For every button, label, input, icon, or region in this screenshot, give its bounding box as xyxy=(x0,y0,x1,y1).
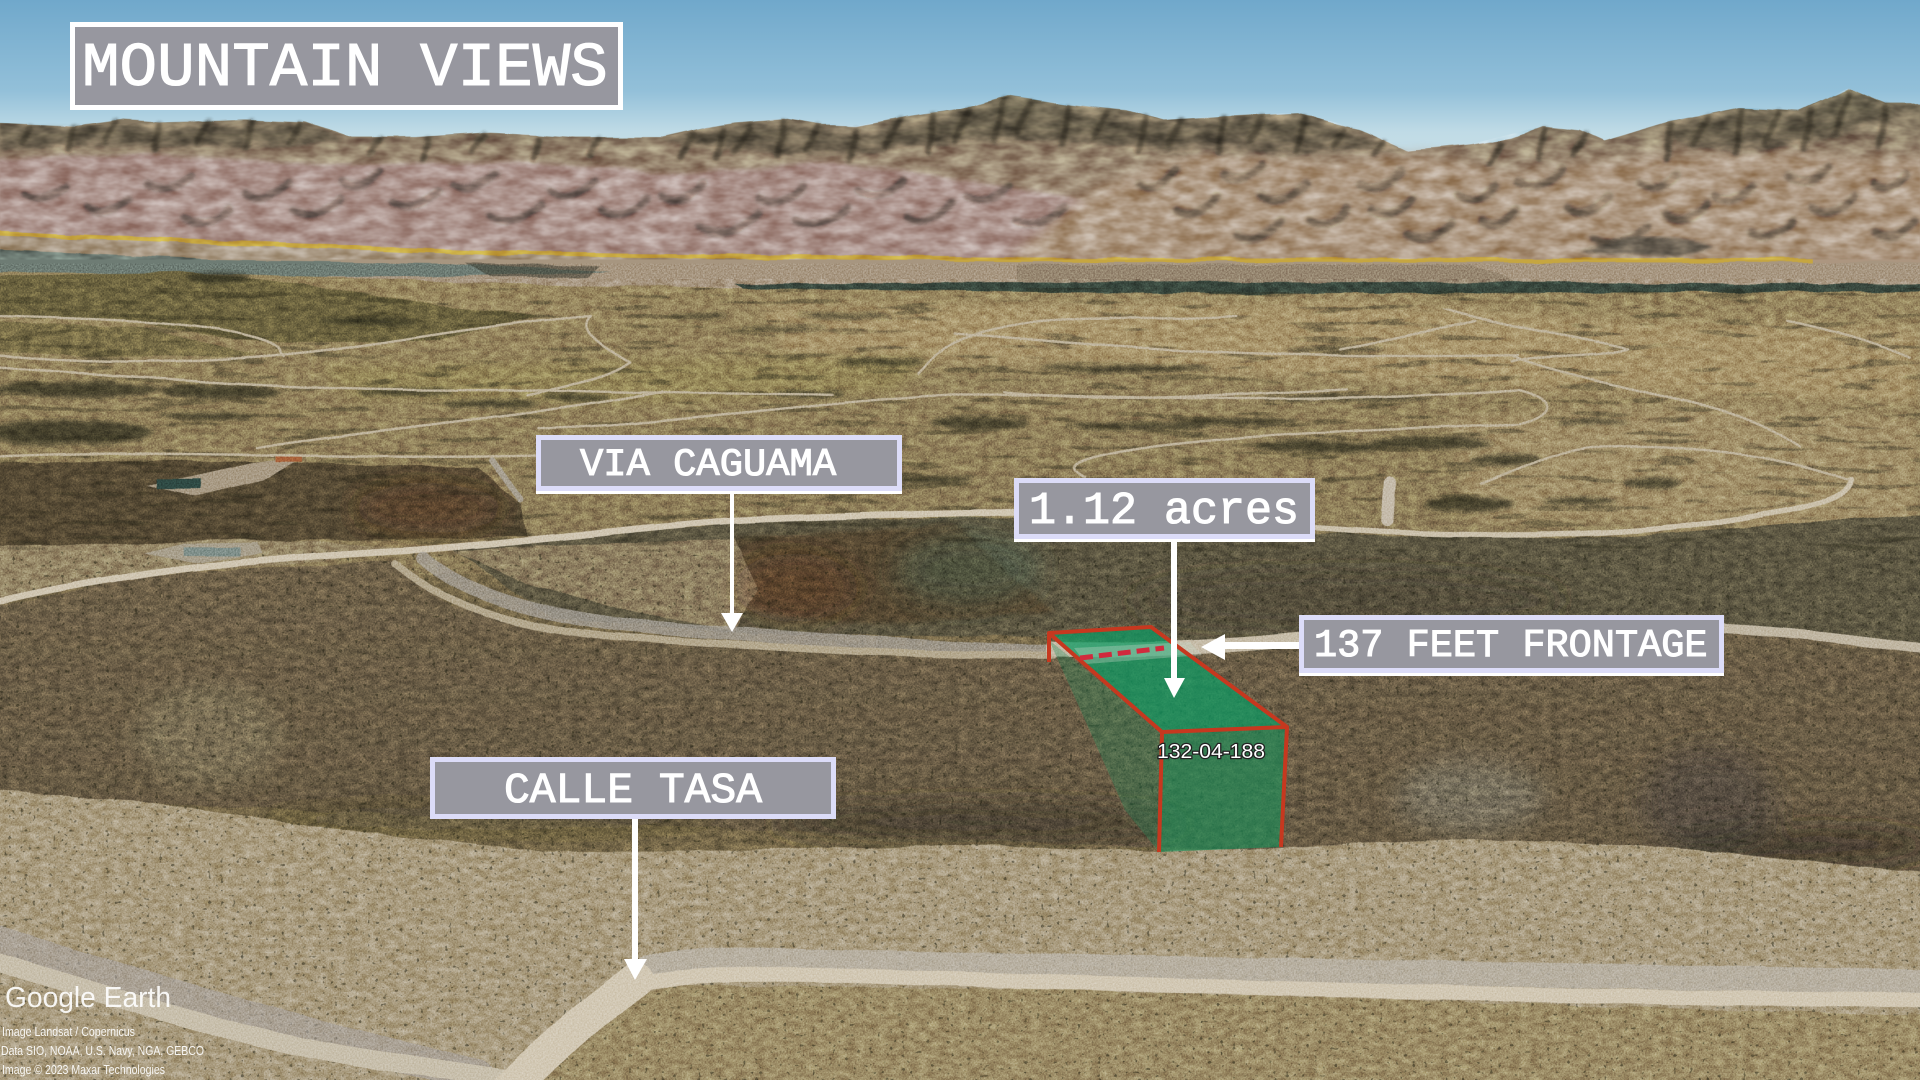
Calle Tasa road xyxy=(0,940,1920,1080)
color patches xyxy=(135,484,1920,862)
thin dirt roads xyxy=(0,309,1910,484)
fine grain over ground xyxy=(0,263,1920,1080)
arrow: 1.12 acres xyxy=(1164,541,1185,698)
dark central hillside xyxy=(453,514,1920,655)
parcel 132-04-188 xyxy=(1049,627,1287,852)
midground streaks xyxy=(0,288,1920,551)
label: 137 feet frontage: 137 FEET FRONTAGE xyxy=(1314,624,1708,668)
far ridge shadows xyxy=(0,93,1892,159)
arrow: Via Caguama xyxy=(721,493,743,632)
Via Caguama road xyxy=(394,558,1920,655)
foothill creases xyxy=(24,164,1915,244)
tan slope below main road xyxy=(0,561,1920,882)
valley floor xyxy=(0,233,1920,294)
imagery attribution xyxy=(1,1025,204,1077)
dark mid-ground streaks xyxy=(0,272,1682,512)
yellow highway xyxy=(0,233,1812,261)
label: 1.12 acres: 1.12 acres xyxy=(1029,486,1299,537)
tan foothills right xyxy=(1004,149,1920,262)
arrow: frontage xyxy=(1201,634,1300,660)
parcel red outline xyxy=(1049,627,1287,852)
far ridge gullies xyxy=(21,93,1886,162)
arrow: Calle Tasa xyxy=(624,819,647,980)
building clusters xyxy=(144,454,306,563)
parcel top face xyxy=(1049,627,1287,732)
midground plain xyxy=(0,272,1920,576)
road network xyxy=(0,309,1920,1080)
dark left hillside xyxy=(0,460,527,580)
mountain range xyxy=(0,88,1920,263)
pink foothills xyxy=(0,154,1139,260)
imagery attribution: Image © 2023 Maxar Technologies xyxy=(2,1063,165,1077)
label: Calle Tasa: CALLE TASA xyxy=(504,766,762,815)
foreground flat xyxy=(0,790,1920,1080)
sky xyxy=(0,0,1920,165)
parcel side face xyxy=(1049,640,1162,852)
parcel number: 132-04-188 xyxy=(1157,741,1265,763)
parcel road crossing xyxy=(1074,642,1202,664)
mountain texture xyxy=(0,88,1920,260)
frontage dashed line xyxy=(1080,648,1164,658)
parcel front face xyxy=(1159,727,1287,852)
Google Earth logo: Google Earth xyxy=(5,982,171,1014)
wide road through center xyxy=(0,460,1851,602)
imagery attribution: Image Landsat / Copernicus xyxy=(2,1025,135,1039)
imagery attribution: Data SIO, NOAA, U.S. Navy, NGA, GEBCO xyxy=(1,1044,204,1058)
label: Calle Tasa xyxy=(430,757,836,819)
title: MOUNTAIN VIEWS xyxy=(82,33,608,104)
label: Via Caguama: VIA CAGUAMA xyxy=(580,443,836,487)
label: Via Caguama xyxy=(536,435,902,491)
ground clump texture xyxy=(0,279,1920,1080)
shrub speckles xyxy=(0,551,1920,1080)
